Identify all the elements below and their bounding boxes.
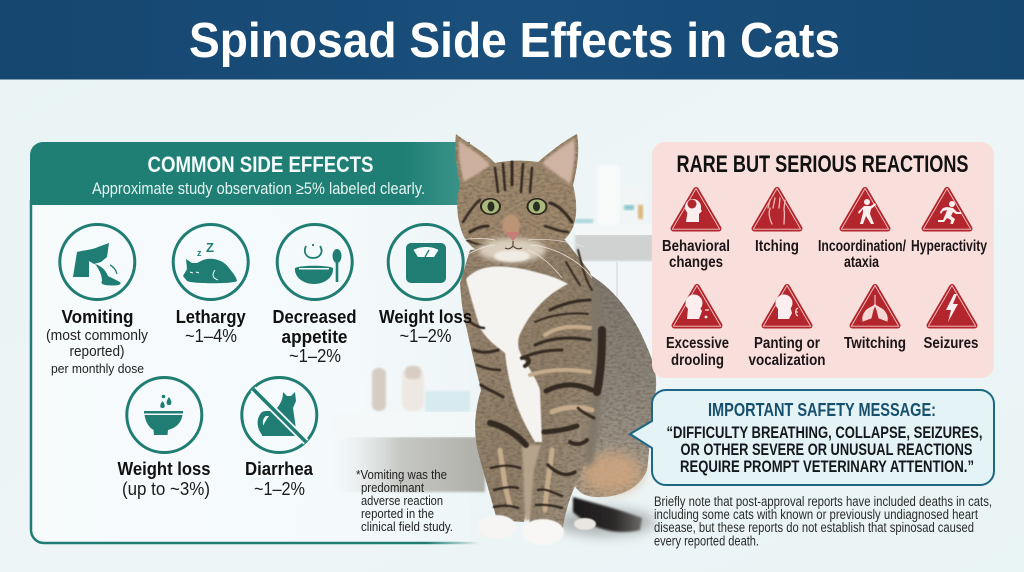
effect: decreased appetite: appetite bbox=[282, 327, 348, 347]
text block: post-approval note bbox=[654, 494, 992, 548]
reaction: behavioral changes: changes bbox=[669, 254, 723, 271]
illustration: tabby cat bbox=[455, 134, 656, 545]
footnote: vomiting: adverse reaction bbox=[361, 494, 443, 508]
effect: weight loss: ~1–2% bbox=[400, 326, 452, 346]
footnote: vomiting: clinical field study. bbox=[361, 520, 453, 534]
reaction: excessive drooling bbox=[666, 286, 729, 369]
effect: lethargy bbox=[173, 224, 248, 346]
cat: whiskers bbox=[462, 238, 592, 278]
reaction: hyperactivity bbox=[911, 188, 987, 255]
text block: post-approval note: every reported death. bbox=[654, 534, 759, 548]
effect: vomiting: (most commonly bbox=[46, 327, 148, 344]
reaction: incoordination / ataxia bbox=[818, 188, 907, 271]
effect: lethargy: ~1–4% bbox=[185, 326, 237, 346]
effect: weight loss bbox=[379, 224, 472, 346]
cat: white chest bbox=[466, 266, 568, 442]
cat: head markings bbox=[463, 162, 572, 245]
effect: diarrhea: Diarrhea bbox=[245, 459, 314, 479]
cat: haunch peach fur bbox=[582, 452, 642, 492]
reaction: excessive drooling: drooling bbox=[671, 352, 724, 369]
effect: lethargy: Lethargy bbox=[176, 307, 246, 327]
footnote: vomiting: reported in the bbox=[361, 507, 434, 521]
cat: body and legs bbox=[460, 240, 597, 528]
panel background: common side effects bbox=[30, 142, 485, 543]
panel border bbox=[31, 200, 480, 543]
panel header band bbox=[30, 142, 470, 205]
cat: eyes bbox=[480, 198, 548, 215]
reaction: excessive drooling: Excessive bbox=[666, 335, 729, 352]
reaction: panting or vocalization: Panting or bbox=[754, 335, 820, 352]
reaction: itching bbox=[753, 188, 801, 255]
cat: haunch bbox=[560, 272, 656, 497]
cat: body stripes bbox=[470, 250, 602, 510]
effect: lethargy: z bbox=[197, 248, 202, 258]
blurred clinic background bbox=[575, 165, 653, 387]
effect: decreased appetite: Decreased bbox=[272, 307, 356, 327]
blurred shelf and bottles behind panel bbox=[330, 366, 485, 492]
effect: weight loss, bowl bbox=[118, 378, 210, 499]
reaction: behavioral changes bbox=[662, 188, 730, 271]
effect: diarrhea: ~1–2% bbox=[254, 479, 305, 499]
footnote: vomiting bbox=[356, 468, 453, 534]
reaction: hyperactivity: Hyperactivity bbox=[911, 238, 987, 255]
cat: front paws bbox=[478, 515, 564, 545]
cat: tail bbox=[573, 497, 642, 532]
effect: decreased appetite bbox=[272, 224, 356, 366]
callout quote bbox=[666, 423, 982, 476]
effect: weight loss: Weight loss bbox=[379, 307, 472, 327]
panel: rare but serious reactions bbox=[652, 142, 994, 378]
reaction: incoordination / ataxia: ataxia bbox=[844, 254, 879, 271]
reaction: seizures bbox=[924, 286, 978, 352]
subheading: Approximate study observation ≥5% labeled clearly. bbox=[92, 180, 425, 198]
effect: vomiting bbox=[46, 224, 148, 376]
reaction: incoordination / ataxia: Incoordination/ bbox=[818, 238, 907, 255]
panel: common side effects bbox=[46, 152, 472, 534]
reaction: panting or vocalization: vocalization bbox=[748, 352, 826, 369]
reaction: behavioral changes: Behavioral bbox=[662, 238, 730, 255]
title banner bbox=[0, 0, 1024, 80]
effect: vomiting: per monthly dose bbox=[51, 362, 144, 376]
cat: gap between legs bbox=[522, 445, 541, 520]
effect: weight loss, bowl: (up to ~3%) bbox=[122, 479, 210, 499]
cat: ears bbox=[459, 139, 575, 184]
cat: seam shading between body and haunch bbox=[588, 285, 597, 465]
reaction: twitching: Twitching bbox=[844, 335, 906, 352]
effect: lethargy: Z bbox=[206, 240, 214, 255]
effect: diarrhea bbox=[242, 378, 317, 499]
callout heading: IMPORTANT SAFETY MESSAGE: bbox=[708, 399, 936, 420]
footnote: vomiting: *Vomiting was the bbox=[356, 468, 447, 482]
effect: vomiting: reported) bbox=[70, 343, 124, 360]
reaction: twitching bbox=[844, 286, 906, 352]
reaction: panting or vocalization bbox=[748, 286, 826, 369]
effect: vomiting: Vomiting bbox=[62, 307, 134, 327]
reaction: itching: Itching bbox=[755, 238, 799, 255]
cat: head bbox=[455, 134, 578, 262]
effect: decreased appetite: ~1–2% bbox=[289, 346, 341, 366]
reaction: seizures: Seizures bbox=[924, 335, 978, 352]
cat: back paw bbox=[574, 518, 596, 530]
cat: nose and mouth bbox=[505, 232, 522, 249]
effect: weight loss, bowl: Weight loss bbox=[118, 459, 210, 479]
heading: common side effects: COMMON SIDE EFFECTS bbox=[148, 152, 374, 177]
footnote: vomiting: predominant bbox=[361, 481, 424, 495]
title: Spinosad Side Effects in Cats bbox=[189, 14, 840, 68]
callout: important safety message bbox=[630, 390, 994, 485]
cat: soft shadow bbox=[555, 508, 655, 536]
cat: muzzle bbox=[478, 214, 546, 262]
